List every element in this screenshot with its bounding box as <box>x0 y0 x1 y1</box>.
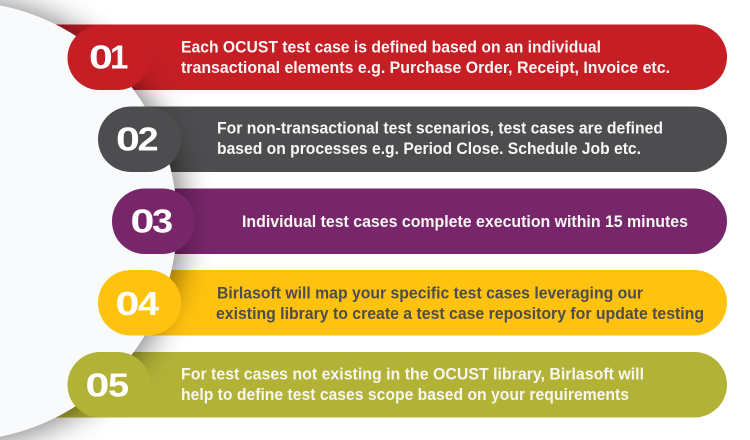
number 03: 0 <box>130 203 154 240</box>
number 02: 2 <box>138 121 159 158</box>
number 02: 0 <box>116 121 140 158</box>
number 01 <box>89 38 128 76</box>
row 2: description: based on processes e.g. Period Close. Schedule Job etc. <box>217 140 641 158</box>
bar: row 4 background <box>20 270 727 336</box>
number 04 <box>116 285 159 323</box>
row 5: description <box>181 366 644 404</box>
number 03: 3 <box>152 203 173 240</box>
row 4: description <box>216 284 704 323</box>
bar: row 3 background <box>20 188 727 254</box>
bar: row 2 background <box>20 106 727 172</box>
row 5: description: help to define test cases scope based on your requirements <box>181 386 629 404</box>
number 04: 0 <box>116 286 139 323</box>
row 4: description: existing library to create a test case repository for update testing <box>216 305 704 323</box>
bar: row 1 background <box>20 24 727 90</box>
number 04: 4 <box>138 285 159 322</box>
number 03 <box>130 203 173 240</box>
number 05: 5 <box>108 367 129 404</box>
number 02 <box>116 121 159 158</box>
large pale circle <box>0 1 177 440</box>
row 4: number badge <box>98 270 181 336</box>
row 1: description <box>181 38 670 77</box>
number 01: 1 <box>110 38 128 76</box>
bar: row 5 background <box>20 352 727 418</box>
row 3: number badge <box>112 188 195 254</box>
row 1: number badge <box>68 26 150 90</box>
number 05 <box>86 367 129 404</box>
row 2: description: For non-transactional test scenarios, test cases are defined <box>217 120 663 138</box>
row 5: description: For test cases not existing in the OCUST library, Birlasoft will <box>181 366 644 384</box>
number 01: 0 <box>89 39 113 76</box>
row 3: description: Individual test cases complete execution within 15 minutes <box>242 213 688 231</box>
number 05: 0 <box>86 367 109 404</box>
row 1: description: transactional elements e.g. Purchase Order, Receipt, Invoice etc. <box>181 59 670 77</box>
circle shadow <box>0 0 184 440</box>
row 5: number badge <box>68 352 150 418</box>
row 2: description <box>217 120 663 158</box>
row 4: description: Birlasoft will map your specific test cases leveraging our <box>217 284 644 302</box>
row 2: number badge <box>98 106 181 172</box>
row 1: description: Each OCUST test case is defined based on an individual <box>181 38 601 56</box>
